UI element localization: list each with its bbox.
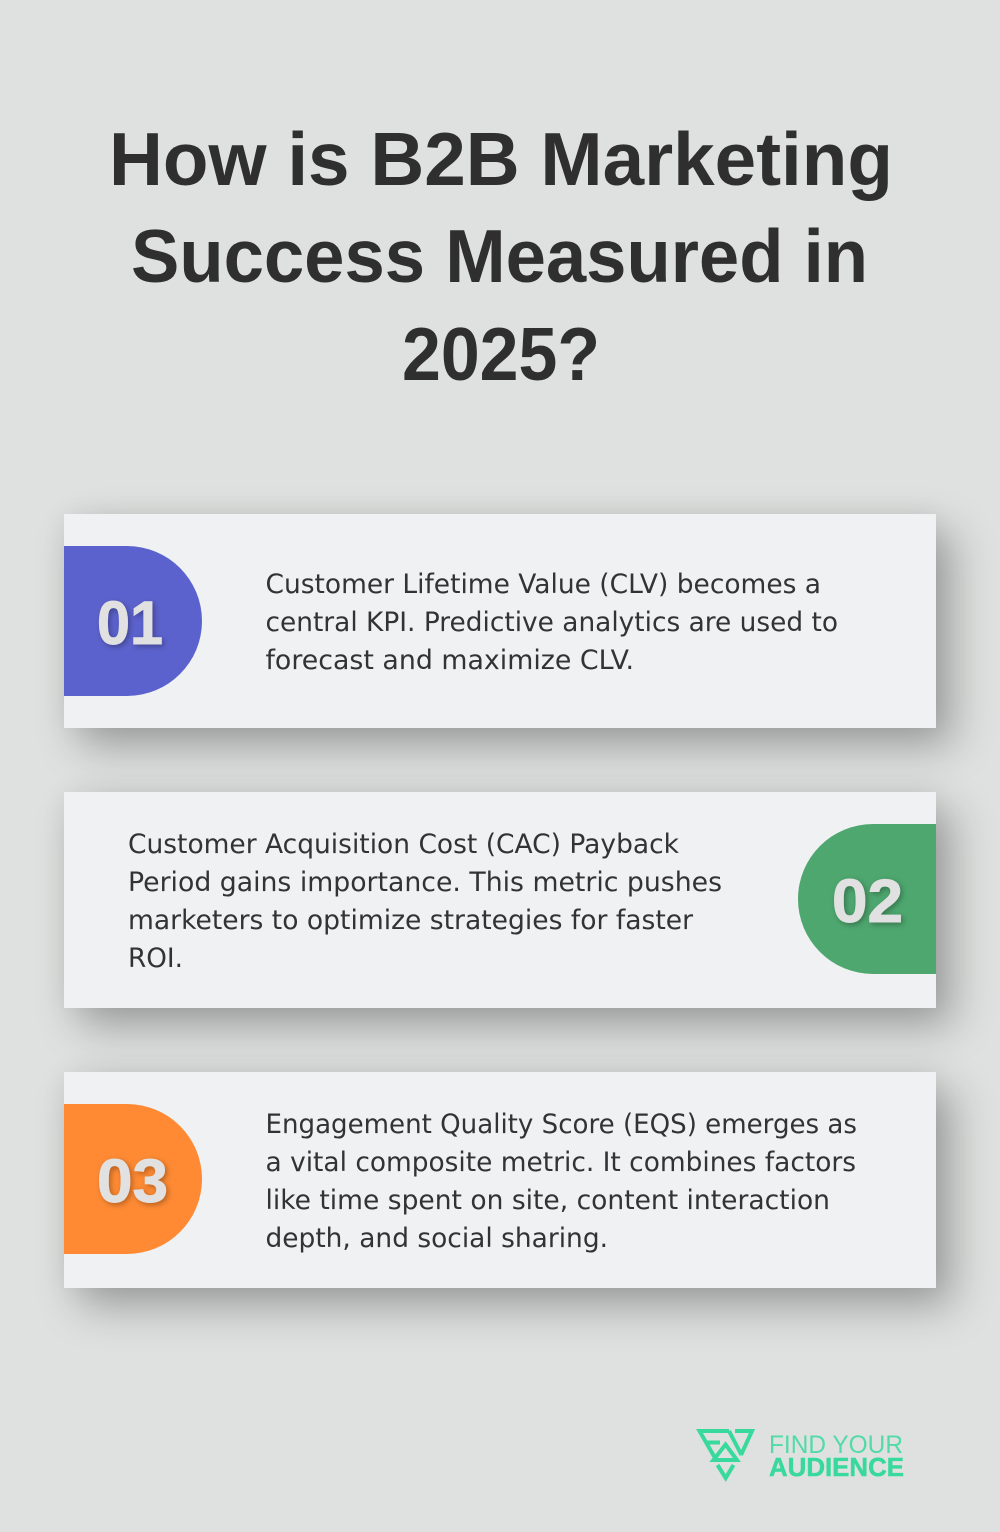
logo wordmark: AUDIENCE bbox=[769, 1452, 904, 1482]
text: customer acquisition cost: ROI. bbox=[128, 943, 183, 974]
badge 1 shape bbox=[64, 546, 202, 696]
text: customer acquisition cost bbox=[128, 829, 722, 974]
text: customer lifetime value: Customer Lifetime Value (CLV) becomes a bbox=[266, 569, 821, 600]
number 02: 02 bbox=[832, 867, 903, 935]
logo wordmark: FIND YOUR bbox=[769, 1431, 903, 1459]
text: engagement quality score: Engagement Quality Score (EQS) emerges as bbox=[266, 1109, 857, 1140]
title: How is B2B Marketing bbox=[109, 117, 893, 201]
icon: logo triangles bbox=[700, 1431, 752, 1478]
text: customer acquisition cost: marketers to optimize strategies for faster bbox=[128, 905, 694, 936]
card 2 background bbox=[64, 792, 936, 1008]
title: Success Measured in bbox=[131, 214, 868, 298]
number 03: 03 bbox=[97, 1147, 168, 1215]
text: customer acquisition cost: Customer Acquisition Cost (CAC) Payback bbox=[128, 829, 679, 860]
text: engagement quality score: like time spent on site, content interaction bbox=[266, 1185, 830, 1216]
text: engagement quality score: a vital composite metric. It combines factors bbox=[266, 1147, 856, 1178]
text: engagement quality score: depth, and social sharing. bbox=[266, 1223, 608, 1254]
text: engagement quality score bbox=[266, 1109, 857, 1254]
logo wordmark bbox=[769, 1431, 904, 1482]
text: customer lifetime value bbox=[266, 569, 838, 676]
number 01: 01 bbox=[97, 589, 163, 657]
card 3 background bbox=[64, 1072, 936, 1288]
text: customer lifetime value: forecast and maximize CLV. bbox=[266, 645, 634, 676]
badge 2 shape bbox=[798, 824, 936, 974]
card 1 background bbox=[64, 514, 936, 728]
title: 2025? bbox=[402, 312, 600, 396]
text: customer acquisition cost: Period gains importance. This metric pushes bbox=[128, 867, 722, 898]
badge 3 shape bbox=[64, 1104, 202, 1254]
text: customer lifetime value: central KPI. Predictive analytics are used to bbox=[266, 607, 838, 638]
logo bbox=[700, 1431, 904, 1482]
title bbox=[109, 117, 893, 396]
